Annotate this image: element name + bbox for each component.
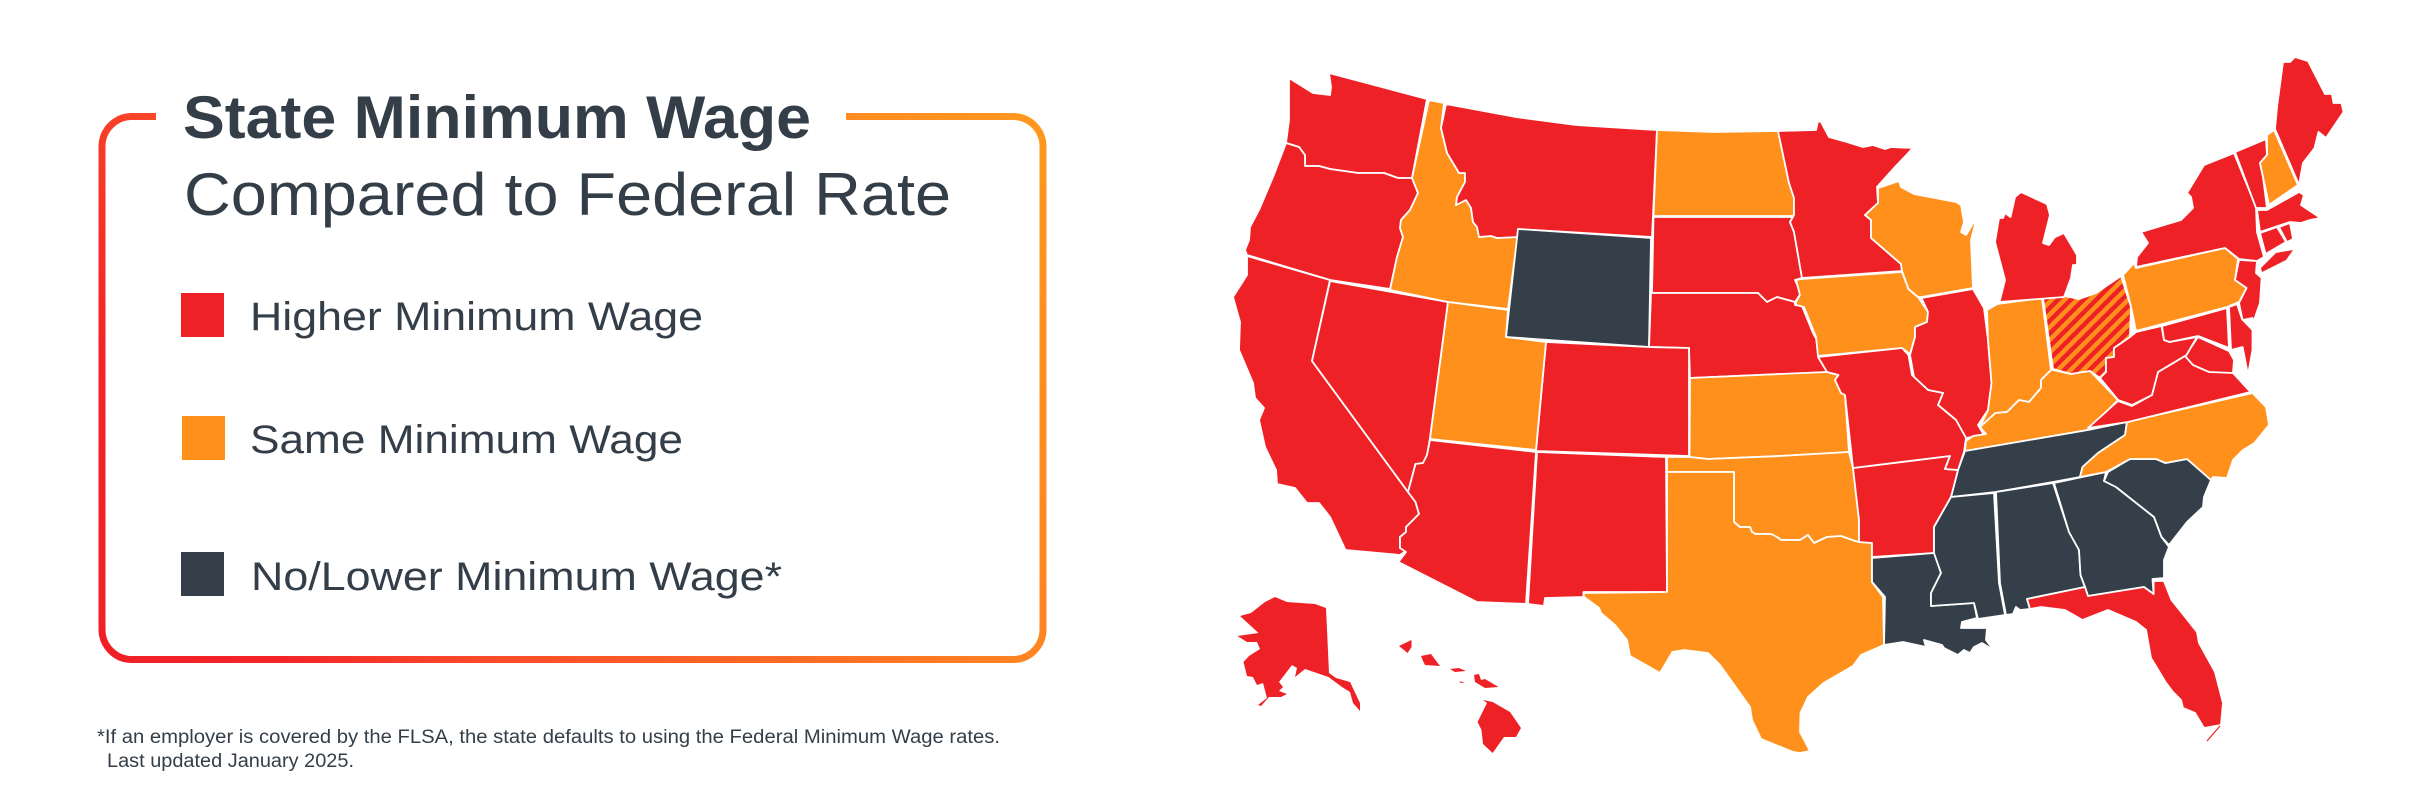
- state: California: [1233, 256, 1419, 555]
- state: Indiana: [1980, 298, 2051, 427]
- footnote: [97, 727, 1000, 772]
- state: Hawaii: [1399, 640, 1521, 753]
- legend item: no or lower minimum wage: No/Lower Minimum Wage*: [251, 555, 782, 599]
- state: Oklahoma: [1667, 452, 1859, 543]
- state: Arizona: [1398, 440, 1536, 604]
- panel: legend frame with gradient border: [102, 116, 1043, 660]
- state: Colorado: [1536, 342, 1689, 456]
- legend item: same minimum wage: Same Minimum Wage: [250, 418, 683, 462]
- florida keys: [2207, 726, 2220, 741]
- state: Washington: [1286, 73, 1427, 178]
- state: New York: [2136, 153, 2264, 267]
- state: Vermont: [2235, 139, 2267, 208]
- state: South Carolina: [2104, 459, 2211, 545]
- virginia inner boundary: [2185, 356, 2233, 373]
- state: Mississippi: [1931, 493, 2005, 619]
- state: Texas: [1584, 472, 1884, 753]
- state: New Jersey: [2235, 260, 2262, 323]
- state: Alaska: [1238, 597, 1360, 711]
- island: Long Island: [2261, 250, 2293, 272]
- state: Arkansas: [1853, 456, 1958, 557]
- state: Minnesota: [1778, 121, 1913, 278]
- state: Nebraska: [1649, 293, 1830, 378]
- state: North Dakota: [1654, 130, 1794, 216]
- state: West Virginia: [2100, 326, 2197, 405]
- state: Pennsylvania: [2123, 248, 2247, 331]
- state: Louisiana: [1872, 553, 1994, 655]
- state: Kansas: [1690, 372, 1849, 459]
- title: State Minimum Wage: [183, 84, 811, 151]
- map: US states coloured by minimum wage status: [1233, 57, 2344, 753]
- state: North Carolina: [2080, 393, 2269, 480]
- state: Virginia: [2088, 337, 2250, 428]
- state: Oregon: [1245, 143, 1418, 289]
- state: Missouri: [1818, 348, 1966, 470]
- state: Massachusetts: [2257, 192, 2320, 232]
- state: Nevada: [1312, 281, 1448, 492]
- state: Idaho: [1390, 100, 1518, 309]
- state: Maine: [2275, 57, 2344, 185]
- state: Connecticut: [2260, 227, 2286, 254]
- footnote: *If an employer is covered by the FLSA, the state defaults to using the Federal Minimum Wage rates.: [97, 727, 1000, 748]
- state: Alabama: [1996, 483, 2085, 615]
- state: Florida: [2027, 581, 2223, 728]
- state: Wyoming: [1506, 229, 1651, 347]
- title: Compared to Federal Rate: [184, 161, 951, 228]
- state: Illinois: [1910, 289, 1992, 438]
- state: Kentucky: [1965, 370, 2118, 451]
- state: Maryland: [2162, 308, 2229, 348]
- state: Ohio (hatched): [2043, 276, 2131, 378]
- state: Michigan: [1995, 192, 2077, 302]
- state: Wisconsin: [1865, 181, 1977, 297]
- peninsula: Delaware and eastern shore: [2229, 304, 2252, 375]
- title: [183, 84, 951, 228]
- state: South Dakota: [1652, 217, 1802, 302]
- footnote: Last updated January 2025.: [107, 751, 354, 772]
- legend item: higher minimum wage: Higher Minimum Wage: [250, 295, 703, 339]
- state: Rhode Island: [2279, 223, 2293, 242]
- state: Utah: [1430, 302, 1546, 450]
- state: Tennessee: [1951, 422, 2127, 497]
- state: New Hampshire: [2260, 130, 2298, 205]
- state: Iowa: [1796, 272, 1928, 356]
- state: Montana: [1441, 104, 1657, 238]
- state: New Mexico: [1528, 452, 1667, 606]
- state: Georgia: [2054, 472, 2169, 596]
